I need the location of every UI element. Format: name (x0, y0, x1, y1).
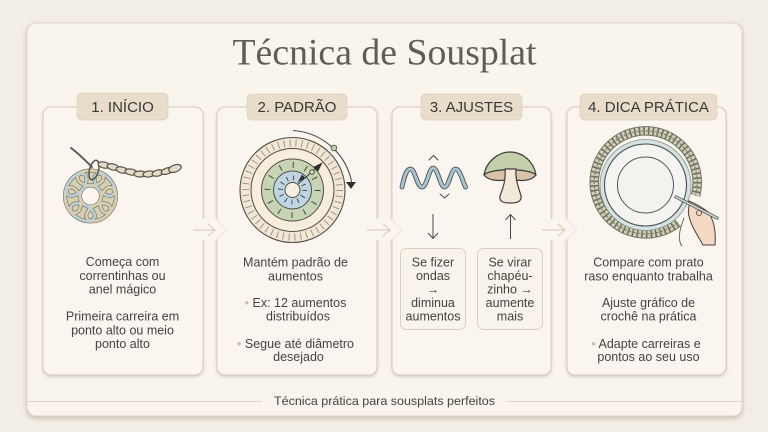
callout: chapéuzinho: Se virar (488, 256, 532, 270)
callout: chapéuzinho: aumente (486, 296, 534, 310)
text: início: correntinhas ou (79, 269, 166, 283)
text: início: ponto alto ou meio (71, 324, 174, 338)
arrow: down (428, 214, 438, 238)
text: dica: pontos ao seu uso (597, 350, 700, 364)
callout: chapéuzinho: mais (497, 310, 523, 324)
callout: chapéuzinho: chapéu- (487, 269, 533, 283)
arrow: up (506, 214, 516, 239)
title: Técnica de Sousplat (232, 32, 537, 74)
panel: 4. dica prática (567, 94, 726, 375)
footer: Técnica prática para sousplats perfeitos (274, 394, 495, 408)
callout: ondas (400, 248, 466, 330)
text: dica: Compare com prato (593, 256, 704, 270)
text: padrão: • Ex: 12 aumentos (245, 296, 346, 310)
panel: 2. padrão (217, 94, 377, 375)
text: início (66, 255, 179, 351)
text: dica: • Adapte carreiras e (591, 337, 701, 351)
callout: ondas: diminua (411, 296, 455, 310)
heading: 2. padrão (247, 94, 347, 120)
callout: ondas: Se fizer (412, 256, 454, 270)
panel: 3. ajustes (392, 94, 551, 375)
text: dica: raso enquanto trabalha (584, 270, 713, 284)
callout: chapéuzinho (478, 248, 542, 330)
icon: mushroom (484, 152, 536, 203)
heading: 3. ajustes (421, 94, 522, 120)
icon: waves (402, 156, 466, 198)
heading: 4. dica prática (580, 94, 717, 120)
text: início: anel mágico (89, 282, 156, 296)
panel: 1. início (43, 93, 203, 375)
text: padrão: desejado (273, 350, 324, 364)
text: dica (584, 256, 713, 364)
text: dica: Ajuste gráfico de (602, 296, 695, 310)
arrow: 3 to 4 (542, 219, 577, 240)
callout: ondas: → (427, 282, 439, 296)
arrow: 2 to 3 (367, 219, 402, 240)
text: padrão: distribuídos (266, 310, 330, 324)
heading: 3. ajustes: 3. AJUSTES (430, 99, 513, 116)
text: padrão: aumentos (268, 270, 323, 284)
heading: 1. início (77, 93, 168, 120)
icon: concentric rounds diagram (240, 130, 356, 242)
heading: 1. início: 1. INÍCIO (91, 99, 154, 116)
heading: 2. padrão: 2. PADRÃO (258, 99, 336, 116)
callout: chapéuzinho: zinho → (487, 282, 533, 296)
callout: ondas: aumentos (406, 310, 460, 324)
icon: plate on crochet placemat with hand (594, 131, 717, 246)
icon: magic ring and chain (63, 148, 182, 225)
arrow: 1 to 2 (193, 219, 227, 240)
text: dica: crochê na prática (601, 310, 696, 324)
heading: 4. dica prática: 4. DICA PRÁTICA (588, 99, 709, 116)
text: padrão: Mantém padrão de (243, 256, 348, 270)
text: início: Primeira carreira em (66, 310, 179, 324)
text: início: ponto alto (95, 337, 150, 351)
callout: ondas: ondas (416, 269, 450, 283)
text: padrão (237, 256, 354, 364)
text: padrão: • Segue até diâmetro (237, 337, 354, 351)
text: início: Começa com (86, 255, 159, 269)
